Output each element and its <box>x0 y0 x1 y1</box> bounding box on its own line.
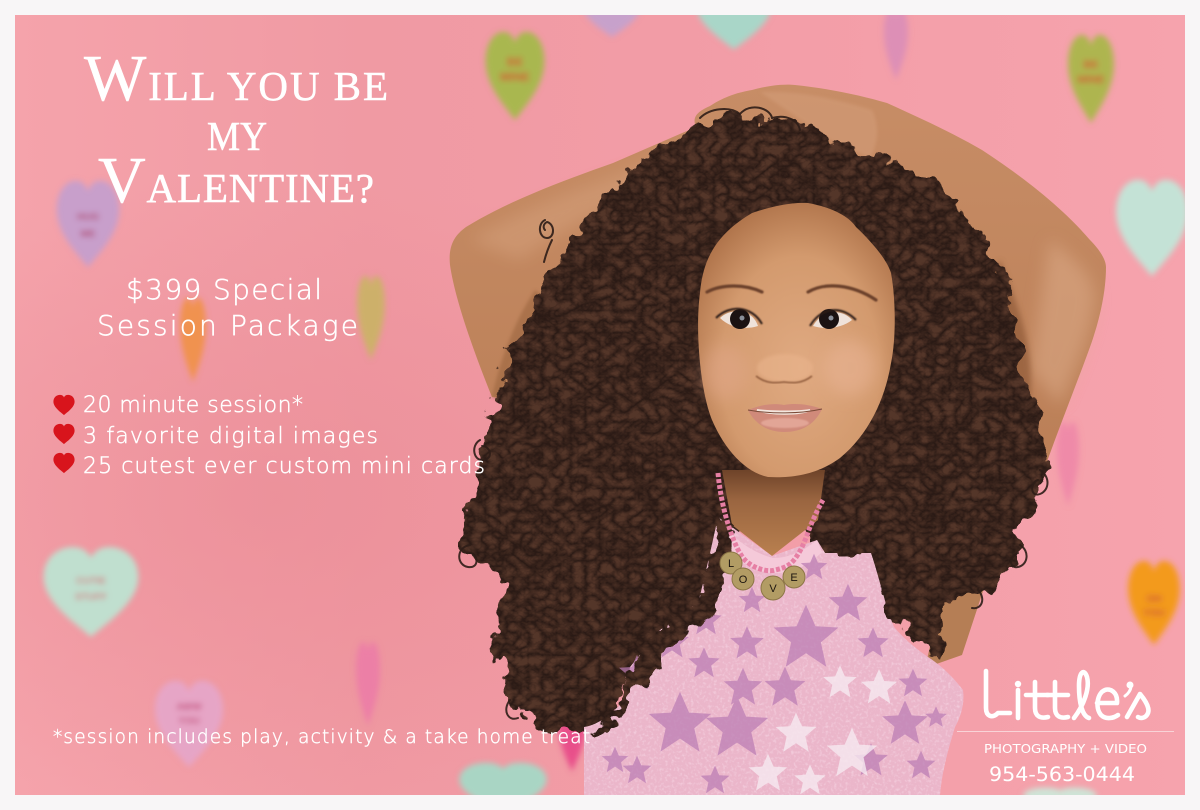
blurred candy hearts: MINE <box>1077 74 1105 86</box>
bullet text 2: 3 favorite digital images <box>83 424 378 449</box>
hair edge curls <box>459 107 1047 719</box>
LOVE necklace <box>718 473 823 600</box>
eyes <box>720 311 852 328</box>
LOVE necklace: O <box>739 574 748 586</box>
blurred candy hearts: HUG <box>77 212 99 223</box>
blurred candy hearts: AWW <box>176 702 202 713</box>
LOVE necklace: L <box>728 558 734 570</box>
blurred candy hearts: STUFF <box>75 592 107 603</box>
title: MY <box>207 113 267 159</box>
logo divider <box>957 731 1174 732</box>
mouth <box>748 404 822 432</box>
dress with sequin stars <box>584 517 963 795</box>
icon: heart bullet 3 <box>53 453 75 473</box>
blurred candy hearts: BE <box>507 55 523 69</box>
underarm skin wedge <box>928 590 984 664</box>
bullet text 3: 25 cutest ever custom mini cards <box>83 454 485 479</box>
arms and hands <box>450 85 1106 668</box>
bullet list <box>53 393 485 479</box>
icon: heart bullet 1 <box>53 395 75 415</box>
blurred candy hearts: YOU <box>178 716 200 727</box>
footnote: *session includes play, activity & a take home treat <box>53 727 590 748</box>
offer heading: $399 Special <box>126 273 322 306</box>
logo tagline: PHOTOGRAPHY + VIDEO <box>984 742 1147 756</box>
eyebrows <box>707 286 876 300</box>
child portrait <box>450 85 1106 795</box>
title <box>84 42 388 217</box>
title: WILL YOU BE <box>84 42 388 115</box>
hair locks over dress <box>590 500 945 735</box>
LOVE necklace: V <box>769 583 777 595</box>
offer heading: Session Package <box>97 309 358 342</box>
neck <box>722 470 825 556</box>
icon: heart bullet 2 <box>53 424 75 444</box>
LOVE necklace: E <box>790 572 798 584</box>
blurred candy hearts: BE <box>1083 59 1099 71</box>
offer heading <box>97 273 358 342</box>
phone number: 954-563-0444 <box>989 763 1135 786</box>
blurred candy hearts: YOU <box>1143 608 1165 619</box>
logo <box>957 671 1174 786</box>
blurred candy hearts: OH <box>1146 594 1162 605</box>
blurred candy hearts: MINE <box>500 70 530 84</box>
logo wordmark <box>986 671 1148 718</box>
title: VALENTINE? <box>98 144 374 217</box>
bullet text 1: 20 minute session* <box>83 393 303 418</box>
face <box>698 203 895 477</box>
blurred candy hearts: CUTIE <box>76 576 106 587</box>
hair mass <box>458 117 1048 732</box>
collar <box>716 526 822 573</box>
blurred candy hearts: ME <box>80 229 96 240</box>
nose <box>758 356 788 380</box>
